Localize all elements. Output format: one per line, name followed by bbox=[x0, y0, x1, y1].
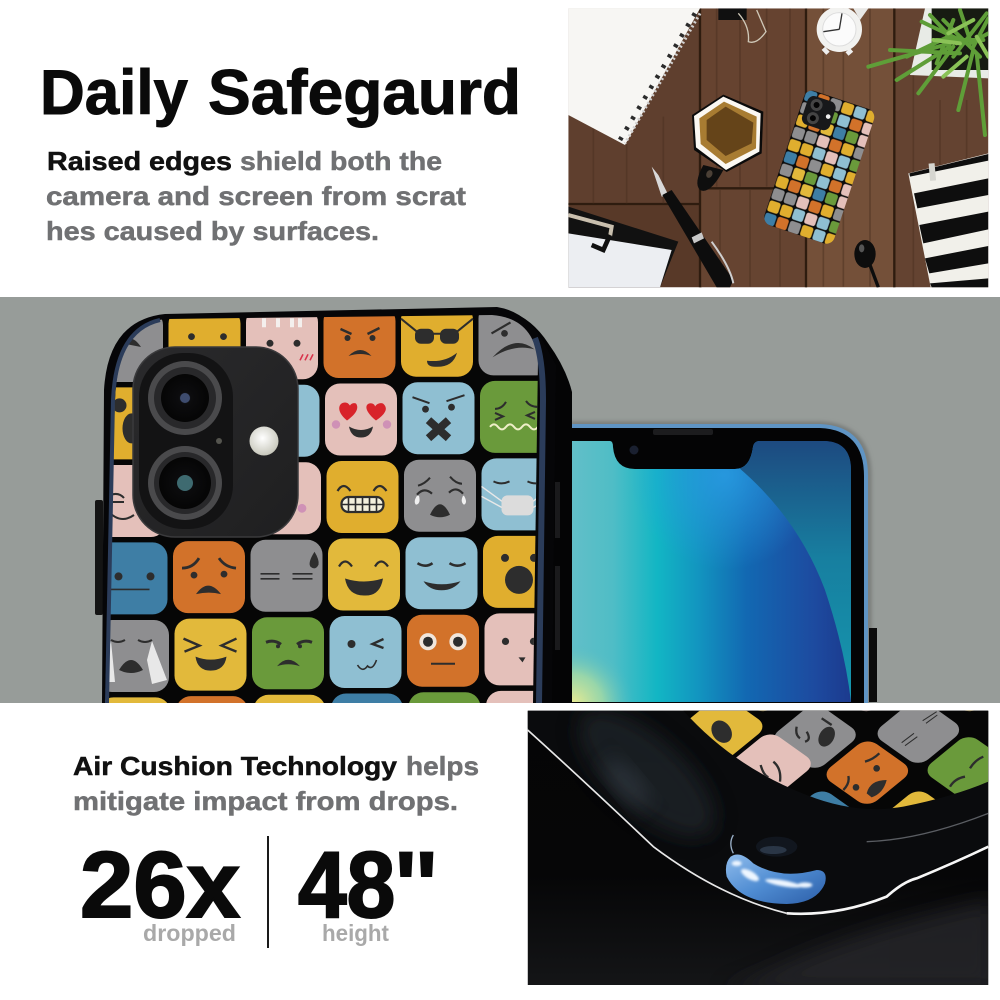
stat: 48 inches height: height bbox=[322, 920, 389, 946]
mini camera bbox=[802, 96, 836, 130]
text block: raised edges description: Raised edges bbox=[47, 146, 232, 176]
title: Daily bbox=[40, 58, 188, 128]
face: mask blue bbox=[481, 458, 537, 530]
text block: air cushion description: Air Cushion Technology bbox=[73, 751, 398, 781]
panel: grey phone band bbox=[0, 297, 1000, 703]
tile faces bbox=[761, 712, 983, 790]
camera module bbox=[133, 347, 298, 537]
face: angry orange bbox=[324, 316, 396, 378]
face: content blue bbox=[406, 537, 478, 609]
clipboard bbox=[568, 207, 678, 287]
soft surface glow bbox=[720, 900, 993, 990]
bumper body bbox=[528, 711, 988, 914]
face: yellow bbox=[168, 318, 240, 347]
text block: raised edges description: camera and screen from scrat bbox=[46, 181, 466, 211]
alarm clock bbox=[817, 7, 868, 54]
emoji row 5 bbox=[97, 613, 556, 692]
emoji row 4 bbox=[96, 536, 555, 614]
upper lens bbox=[148, 361, 222, 435]
blue frame bbox=[570, 426, 866, 703]
stat: 48 inches height: 48'' bbox=[298, 832, 437, 937]
emoji row 2 bbox=[92, 381, 552, 459]
pen bbox=[652, 167, 733, 287]
text block: raised edges description: hes caused by surfaces. bbox=[46, 216, 379, 246]
lens housing bbox=[139, 353, 233, 529]
face: pink bbox=[484, 613, 556, 685]
text block: air cushion description: helps bbox=[406, 751, 479, 781]
face: muted blue bbox=[402, 382, 474, 454]
side button bbox=[869, 628, 877, 702]
bumper inner edge shine bbox=[867, 813, 988, 842]
emoji row 6 bbox=[98, 691, 558, 769]
face: crying grey bbox=[404, 460, 476, 532]
top glow bbox=[658, 441, 790, 550]
plant bbox=[868, 8, 988, 135]
face: tears grey bbox=[97, 620, 169, 692]
face: sweat grey bbox=[250, 540, 322, 612]
striped notebook bbox=[908, 153, 988, 287]
tile: pink bbox=[272, 462, 321, 534]
text block: air cushion description bbox=[73, 751, 479, 816]
title bbox=[40, 58, 521, 128]
black bezel bbox=[570, 427, 864, 703]
text block: air cushion description: mitigate impact from drops. bbox=[73, 786, 458, 816]
face: frowning grey bbox=[478, 315, 538, 376]
notebook bbox=[568, 8, 700, 145]
face: blushing pink bbox=[246, 317, 318, 380]
face: upset green bbox=[252, 617, 324, 689]
panel: emoji case pattern bbox=[105, 315, 538, 703]
binder clip bbox=[718, 8, 766, 42]
face: grin yellow bbox=[326, 461, 398, 533]
wood planks bbox=[568, 8, 988, 287]
emoji row 3 bbox=[94, 458, 554, 537]
face: grey bbox=[116, 320, 163, 382]
photo: air cushion corner close-up bbox=[528, 645, 1000, 990]
mini phone case bbox=[762, 88, 877, 246]
stat: 26x dropped: dropped bbox=[143, 920, 236, 946]
face: heart eyes pink bbox=[325, 384, 397, 456]
text block: raised edges description bbox=[46, 146, 466, 246]
title: Safegaurd bbox=[208, 58, 521, 128]
right phone with screen bbox=[570, 424, 877, 703]
face: winking blue bbox=[330, 616, 402, 688]
screen wallpaper bbox=[572, 440, 855, 702]
emoji pattern inside case bbox=[653, 645, 1000, 858]
frame shadow bbox=[570, 424, 869, 703]
tilted tiles bbox=[675, 645, 1000, 858]
face: neutral dark blue bbox=[96, 542, 168, 614]
bumper highlight bbox=[598, 753, 655, 814]
lower lens bbox=[148, 446, 222, 520]
stat divider bbox=[267, 836, 269, 948]
bumper wide sheen bbox=[558, 688, 736, 859]
face: worried orange bbox=[173, 541, 245, 613]
coffee cup bbox=[692, 95, 763, 191]
bottom-left yellow glow bbox=[572, 657, 626, 702]
air cushion droplet bbox=[726, 835, 826, 904]
flash bbox=[250, 426, 278, 456]
spoon bbox=[854, 240, 878, 287]
main gradient bbox=[572, 440, 852, 702]
photo: phone case on wooden desk bbox=[568, 7, 988, 287]
face: sunglasses yellow bbox=[400, 315, 474, 377]
microphone bbox=[216, 438, 222, 444]
emoji row 1 bbox=[116, 315, 538, 382]
right curved section bbox=[738, 441, 855, 702]
text block: raised edges description: shield both the bbox=[240, 146, 442, 176]
face: happy yellow bbox=[328, 538, 400, 610]
face: laughing yellow bbox=[174, 619, 246, 691]
face: sick green bbox=[480, 380, 538, 453]
left phone case shadow and rim bbox=[95, 307, 572, 703]
camera dot and speaker bbox=[630, 446, 638, 454]
case inner blue rim bbox=[107, 320, 543, 703]
face: laughing pink bbox=[112, 465, 160, 537]
face: shocked yellow bbox=[483, 536, 555, 608]
outer white edge line bbox=[528, 730, 787, 913]
panel: white lower section bbox=[0, 703, 1000, 1000]
tile: light blue bbox=[298, 384, 320, 457]
face: wide eyes orange bbox=[407, 615, 479, 687]
stat: 26x dropped: 26x bbox=[80, 832, 240, 937]
face: surprised yellow bbox=[114, 387, 132, 460]
